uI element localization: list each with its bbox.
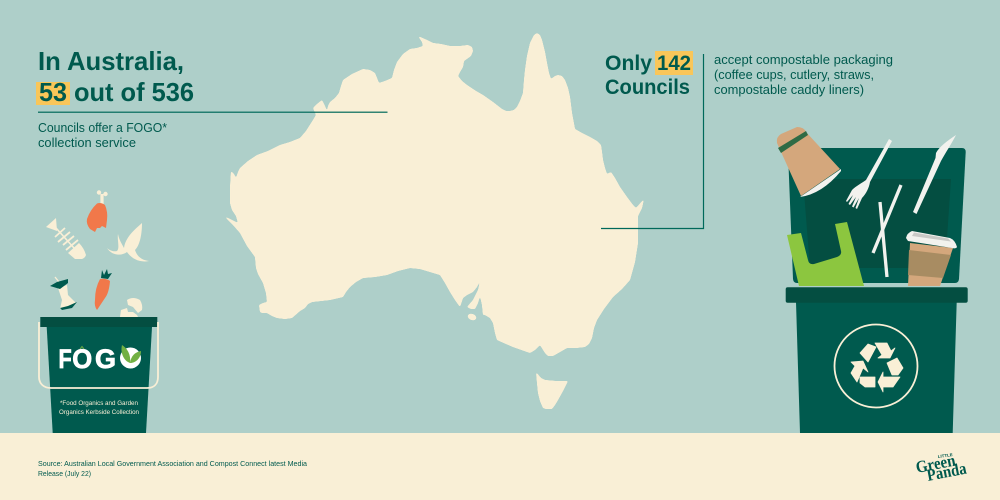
- icon: straws: [873, 185, 901, 277]
- icon: fish skeleton: [46, 218, 86, 259]
- map of Australia: [224, 33, 644, 409]
- icon: banana peel: [107, 223, 149, 261]
- FOGO logo: O: [72, 343, 92, 374]
- right callout heading: [605, 51, 693, 99]
- bucket body: [47, 327, 152, 433]
- icon: recycling symbol: [834, 324, 918, 408]
- bucket footnote: *Food Organics and Garden: [60, 400, 138, 407]
- Kangaroo Island: [467, 313, 477, 321]
- FOGO logo: [58, 343, 141, 374]
- icon: takeaway coffee cup: [906, 231, 957, 286]
- right callout body text: accept compostable packaging: [714, 53, 893, 67]
- FOGO logo: F: [58, 345, 72, 374]
- icon: carrot: [95, 269, 112, 310]
- icon: tilted paper cup: [777, 127, 841, 197]
- bin lid: [786, 287, 968, 303]
- icon: egg shell: [120, 298, 142, 317]
- source note: Release (July 22): [38, 469, 91, 478]
- left callout body text: collection service: [38, 135, 136, 150]
- highlight behind 53: [36, 82, 70, 105]
- icon: knife: [913, 135, 956, 214]
- Little Green Panda logo: Panda: [925, 459, 968, 485]
- FOGO bucket: [39, 317, 158, 433]
- bucket footnote: [59, 400, 139, 416]
- bucket footnote: Organics Kerbside Collection: [59, 409, 139, 416]
- left leader line: [38, 112, 388, 113]
- bucket rim: [40, 317, 157, 327]
- left callout heading: out of 536: [74, 77, 194, 107]
- icon: apple core: [50, 277, 77, 310]
- footer band: [0, 433, 1000, 500]
- Little Green Panda logo: [914, 451, 968, 485]
- Little Green Panda logo: Green: [914, 451, 957, 477]
- FOGO logo: G: [95, 344, 116, 374]
- right callout heading: 142: [657, 52, 691, 75]
- source note: [38, 459, 308, 478]
- compost bin back panel: [788, 148, 966, 283]
- icon: green compostable bag: [787, 222, 864, 286]
- left callout body text: Councils offer a FOGO*: [38, 120, 167, 135]
- Little Green Panda logo: LITTLE: [937, 452, 953, 459]
- left callout heading: [36, 46, 194, 107]
- left callout body text: [38, 120, 167, 150]
- icon: leaf on logo: [121, 345, 141, 363]
- right callout heading: Councils: [605, 76, 690, 99]
- Tasmania: [536, 372, 568, 409]
- compost bin body: [786, 287, 968, 433]
- bucket handle: [39, 322, 158, 388]
- left callout heading: In Australia,: [38, 46, 184, 76]
- source note: Source: Australian Local Government Association and Compost Connect latest Media: [38, 459, 308, 468]
- icon: fork: [846, 139, 892, 209]
- right callout heading: Only: [605, 52, 652, 75]
- right callout body text: (coffee cups, cutlery, straws,: [714, 68, 874, 82]
- left callout heading: 53: [39, 77, 67, 107]
- highlight behind 142: [655, 51, 693, 75]
- right callout body text: compostable caddy liners): [714, 83, 864, 97]
- right leader line: [601, 54, 704, 228]
- right callout body text: [714, 53, 893, 97]
- icon: chicken drumstick: [87, 190, 108, 232]
